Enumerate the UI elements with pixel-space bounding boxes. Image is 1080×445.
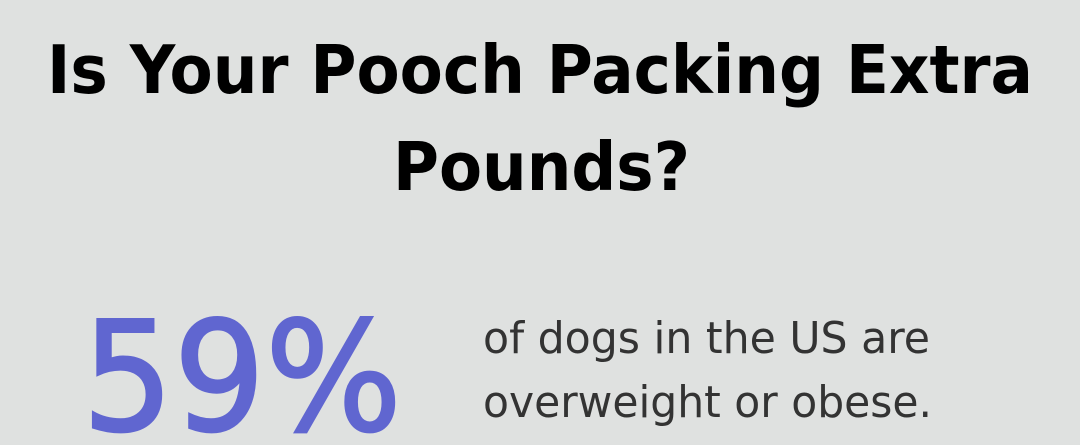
- title: [47, 31, 1033, 206]
- statistic description: of dogs in the US are: [483, 313, 930, 364]
- title: Pounds?: [393, 128, 690, 206]
- title: Is Your Pooch Packing Extra: [47, 31, 1033, 109]
- statistic description: [483, 313, 932, 428]
- statistic description: overweight or obese.: [483, 377, 932, 428]
